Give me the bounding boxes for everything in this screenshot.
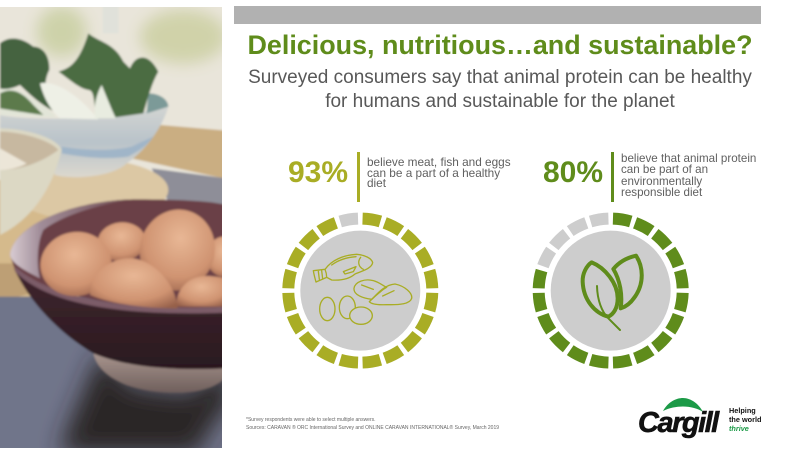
logo tagline: Helping (729, 406, 756, 415)
ring segments (530, 210, 692, 371)
donut: 80% with leaves (532, 212, 689, 368)
subtitle (248, 67, 752, 112)
icon: leaves (583, 256, 642, 330)
text: environmentally responsible diet: environmentally (621, 175, 702, 188)
ring segments (279, 210, 441, 371)
divider: 93% (357, 152, 360, 202)
text: healthy diet (367, 155, 511, 190)
gray disc (300, 231, 420, 351)
icon: fish, meat and eggs (313, 254, 412, 324)
text: healthy diet: believe meat, fish and eggs (367, 155, 511, 169)
text: environmentally responsible diet (621, 152, 756, 199)
footnote: Sources: CARAVAN ® ORC International Survey and ONLINE CARAVAN INTERNATIONAL® Survey, March 2019 (246, 425, 499, 431)
logo tagline: thrive (729, 424, 749, 433)
logo tagline (729, 406, 761, 433)
footnote: *Survey respondents were able to select multiple answers. (246, 417, 376, 423)
title: Delicious, nutritious…and sustainable? (247, 30, 752, 60)
logo arc (663, 398, 702, 412)
photo: bowls of eggs and greens (0, 7, 222, 448)
logo tagline: the world (729, 415, 761, 424)
text: environmentally responsible diet: can be part of an (621, 163, 708, 176)
text: environmentally responsible diet: believe that animal protein (621, 152, 756, 165)
footnote (246, 417, 499, 431)
text: healthy diet: can be a part of a healthy (367, 166, 500, 180)
gray disc (551, 231, 671, 351)
subtitle: Surveyed consumers say that animal protein can be healthy (248, 67, 752, 88)
top gray bar (234, 6, 761, 24)
stat: 80%: 80% (543, 156, 603, 189)
logo wordmark: Cargill (638, 407, 718, 439)
text: healthy diet: diet (367, 176, 386, 190)
logo: Cargill (638, 398, 761, 439)
stat: 93%: 93% (288, 156, 348, 189)
donut: 93% with fish, meat and eggs (282, 212, 438, 368)
text: environmentally responsible diet: responsible diet (621, 186, 702, 199)
divider: 80% (611, 152, 614, 202)
subtitle: for humans and sustainable for the planet (325, 90, 675, 112)
